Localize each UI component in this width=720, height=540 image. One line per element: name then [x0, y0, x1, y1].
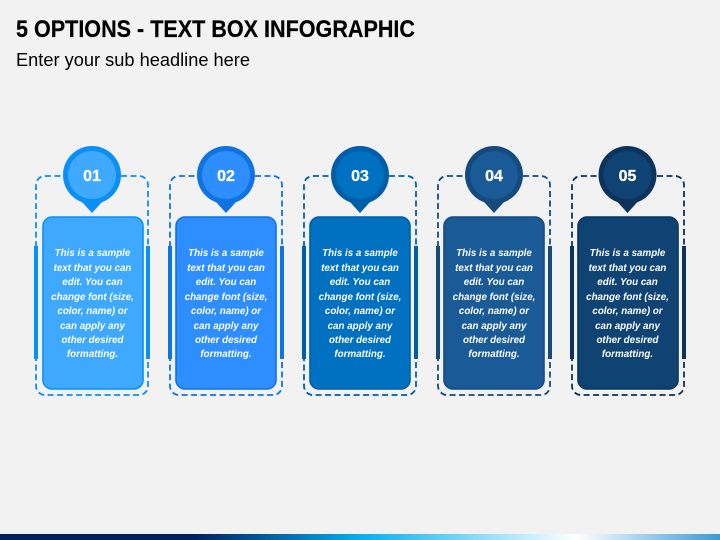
- text block 01: text that you can: [54, 263, 131, 274]
- footer gradient bar: [0, 534, 720, 540]
- card 02: [176, 217, 276, 389]
- panel: option 01: [34, 146, 150, 395]
- side bars 04: [436, 246, 552, 359]
- text block 01: This is a sample: [55, 248, 131, 259]
- text block 05: formatting.: [602, 349, 653, 360]
- marker 04: 04: [485, 168, 503, 185]
- marker 03: 03: [351, 168, 369, 185]
- card 04: [444, 217, 544, 389]
- marker 02: 02: [217, 168, 235, 185]
- text block 05: change font (size,: [586, 292, 669, 303]
- card 01: [43, 217, 143, 389]
- text block 03: change font (size,: [319, 292, 401, 303]
- text block 04: other desired: [463, 335, 526, 346]
- text block 04: formatting.: [468, 349, 520, 360]
- text block 01: color, name) or: [57, 306, 129, 317]
- marker 05: [598, 146, 656, 213]
- card 05: [578, 217, 678, 389]
- text block 03: edit. You can: [330, 277, 390, 288]
- text block 04: edit. You can: [464, 277, 524, 288]
- text block 02: This is a sample: [188, 248, 264, 259]
- text block 04: This is a sample: [456, 248, 532, 259]
- text block 04: text that you can: [455, 263, 533, 274]
- text block 01: edit. You can: [62, 277, 123, 288]
- text block 01: formatting.: [67, 349, 118, 360]
- text block 05: can apply any: [595, 321, 660, 332]
- panel: option 04: [436, 146, 552, 395]
- text block 02: color, name) or: [191, 306, 262, 317]
- text block 05: This is a sample: [590, 248, 666, 259]
- text block 05: color, name) or: [592, 306, 664, 317]
- panel: option 02: [168, 146, 284, 395]
- text block 03: can apply any: [328, 321, 393, 332]
- marker 01: [63, 146, 121, 213]
- side bars 03: [302, 246, 418, 359]
- text block 03: other desired: [329, 335, 392, 346]
- marker 05: 05: [619, 168, 636, 185]
- text block 02: text that you can: [187, 263, 265, 274]
- panel: option 03: [302, 146, 418, 395]
- dashed frame 05: [572, 176, 684, 395]
- marker 01: 01: [83, 168, 101, 185]
- marker 02: [197, 146, 255, 213]
- side bars 05: [570, 246, 686, 359]
- text block 02: formatting.: [200, 349, 252, 360]
- side bars 02: [168, 246, 284, 359]
- title: 5 OPTIONS - TEXT BOX INFOGRAPHIC: [16, 16, 415, 43]
- dashed frame 01: [36, 176, 148, 395]
- dashed frame 04: [438, 176, 550, 395]
- subtitle: Enter your sub headline here: [16, 50, 250, 70]
- text block 01: change font (size,: [51, 292, 134, 303]
- text block 04: can apply any: [462, 321, 527, 332]
- text block 04: change font (size,: [453, 292, 535, 303]
- text block 03: formatting.: [334, 349, 386, 360]
- marker 04: [465, 146, 523, 213]
- text block 05: other desired: [596, 335, 660, 346]
- card 03: [310, 217, 410, 389]
- text block 01: other desired: [61, 335, 125, 346]
- dashed frame 03: [304, 176, 416, 395]
- marker 03: [331, 146, 389, 213]
- side bars 01: [34, 246, 150, 359]
- text block 02: other desired: [195, 335, 258, 346]
- panel: option 05: [570, 146, 686, 395]
- dashed frame 02: [170, 176, 282, 395]
- text block 04: color, name) or: [459, 306, 530, 317]
- text block 03: This is a sample: [322, 248, 398, 259]
- text block 03: color, name) or: [325, 306, 396, 317]
- text block 02: edit. You can: [196, 277, 256, 288]
- text block 01: can apply any: [60, 321, 125, 332]
- text block 02: can apply any: [194, 321, 259, 332]
- text block 05: edit. You can: [597, 277, 658, 288]
- text block 05: text that you can: [589, 263, 666, 274]
- text block 03: text that you can: [321, 263, 399, 274]
- text block 02: change font (size,: [185, 292, 267, 303]
